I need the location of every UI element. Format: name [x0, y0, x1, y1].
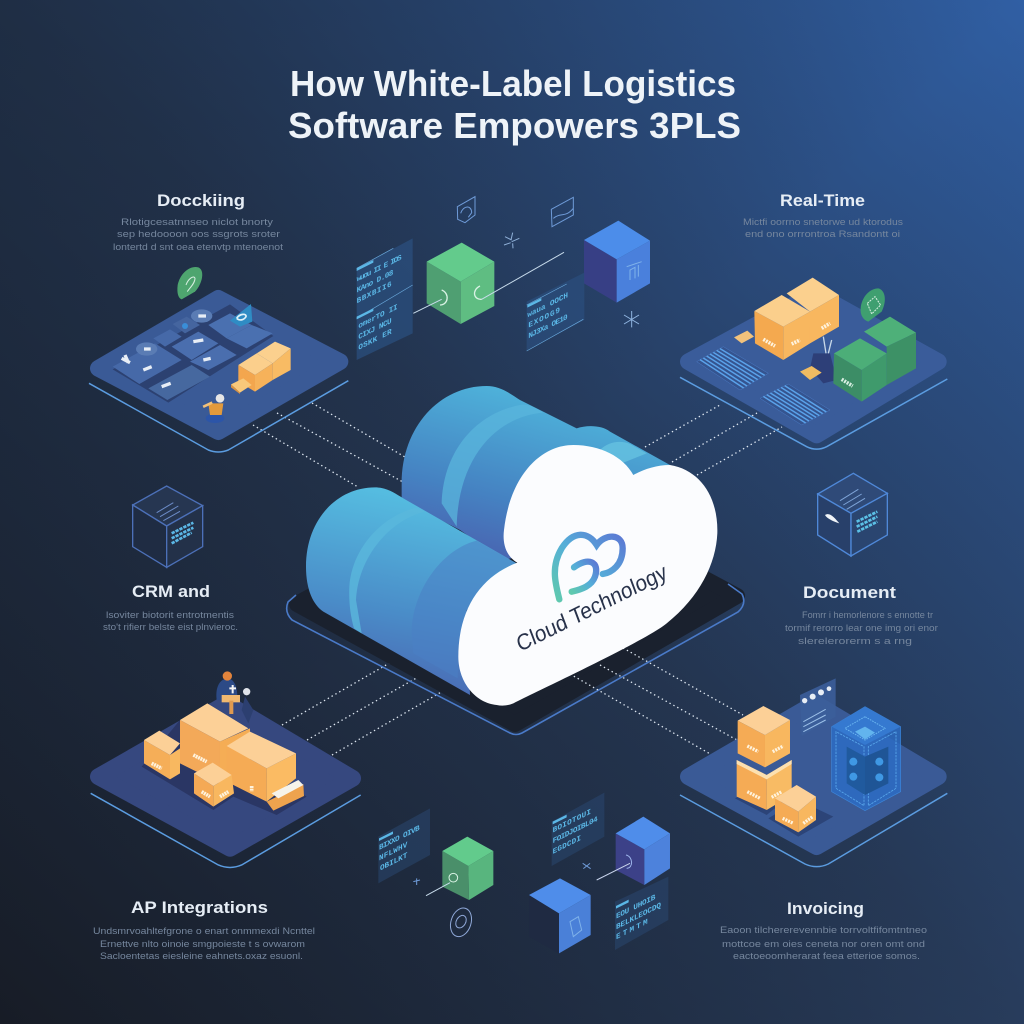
- real-time description: [743, 217, 903, 240]
- orange boxes: [231, 342, 291, 394]
- floating data sheets: EOU UHOIB: [616, 893, 655, 921]
- blue cube lower: [529, 878, 591, 953]
- title: [288, 63, 741, 146]
- dashboard window: [800, 678, 836, 736]
- floating data sheet left: omerTO II: [358, 303, 398, 331]
- icon: crm box: [133, 486, 203, 567]
- api description: [93, 926, 315, 962]
- cloud front lobe band: [349, 507, 425, 633]
- floating data sheet right: [527, 273, 584, 351]
- orange boxes: [735, 706, 833, 837]
- box shadow: [142, 720, 307, 815]
- crm heading: CRM and: [132, 582, 210, 601]
- floating data sheets: [378, 793, 668, 950]
- floating data sheet left: wuou II E IOS: [357, 253, 402, 284]
- blue cube upper: [583, 817, 670, 885]
- api description: Undsmrvoahltefgrone o enart onmmexdi Ncnttel: [93, 926, 315, 937]
- cloud white face: [458, 445, 717, 706]
- panel surface: [688, 293, 938, 435]
- icon: teal pin: [230, 304, 252, 327]
- invoicing heading: Invoicing: [787, 899, 864, 918]
- document description: [785, 610, 938, 647]
- orange boxes: [734, 278, 839, 360]
- floating data sheet left: KAno D.08: [357, 269, 393, 295]
- document description: slerelerorerm s a rng: [798, 636, 912, 647]
- real-time heading: Real-Time: [780, 191, 865, 210]
- document heading: Document: [803, 583, 896, 602]
- floating data sheets: BELKLEOCDQ: [616, 901, 661, 932]
- worker figures: [216, 671, 253, 723]
- icon: green pin: [177, 267, 202, 299]
- icon: document box: [818, 473, 887, 556]
- icon: ring: [447, 905, 475, 939]
- floating data sheet left: BBXBII6: [357, 280, 392, 306]
- hub: upper integration cubes: [357, 197, 650, 360]
- panel surface: [98, 703, 353, 848]
- document description: Fomrr i hemorlenore s ennotte tr: [802, 610, 933, 621]
- invoicing description: Eaoon tilchererevennbie torrvoltfifomtntneo: [720, 925, 927, 936]
- panel: docking: [89, 267, 348, 452]
- dotted connectors: [253, 403, 782, 755]
- real-time description: end ono orrrontroa Rsandontt oi: [745, 229, 900, 240]
- floating data sheet left: OSKK ER: [358, 328, 392, 353]
- cloud front lobe: [306, 487, 517, 695]
- panel surface: [98, 298, 340, 432]
- green cube: [413, 243, 564, 324]
- docking heading: Docckiing: [157, 191, 245, 210]
- invoicing description: [720, 925, 927, 962]
- panel: invoicing: [680, 678, 947, 867]
- hub: lower integration cubes: [378, 793, 670, 953]
- cloud label: Cloud Technology: [513, 559, 670, 657]
- title: How White-Label Logistics: [290, 63, 736, 104]
- docking description: [113, 217, 283, 253]
- title: Software Empowers 3PLS: [288, 105, 741, 146]
- central platform: [287, 480, 744, 734]
- floating data sheet right: NJ3Xa OE10: [528, 313, 568, 341]
- real-time description: Mictfi oorrno snetorwe ud ktorodus: [743, 217, 903, 228]
- crm description: [103, 610, 238, 633]
- floating data sheet right: waua OOCH: [527, 291, 568, 320]
- panel base edge: [680, 793, 947, 867]
- panel base edge: [91, 793, 361, 867]
- cloud back lobe: [402, 386, 670, 560]
- cloud right lobe band: [600, 442, 647, 467]
- invoicing description: mottcoe em oies ceneta nor oren omt ond: [722, 939, 925, 950]
- cloud logo: [555, 535, 623, 599]
- crm description: sto't rifierr belste eist plnvieroc.: [103, 622, 238, 633]
- docking description: lontertd d snt oea etenvtp mtenoenot: [113, 242, 283, 253]
- cloud: [306, 386, 717, 706]
- dotted connectors over platform: [570, 648, 743, 755]
- floating data sheet left: [357, 238, 413, 360]
- worker figure: [203, 394, 224, 423]
- floating data sheets: OBILKT: [380, 851, 407, 873]
- cloud back lobe band: [442, 405, 543, 527]
- floating data sheets: BIXXO OIVB: [379, 824, 420, 853]
- holographic server cube: [832, 707, 901, 811]
- orange boxes: [144, 703, 304, 811]
- crm description: lsoviter biotorit entrotmentis: [106, 610, 234, 621]
- floating data sheet left: CIXJ NCU: [358, 317, 392, 342]
- cloud front lobe inner shade: [412, 541, 517, 678]
- conveyor pads: [697, 347, 830, 425]
- panel base edge: [89, 381, 348, 452]
- docking description: sep hedoooon oos ssgrots sroter: [117, 229, 280, 240]
- docking description: Rlotigcesatnnseo niclot bnorty: [121, 217, 273, 228]
- blue cube: [584, 221, 650, 303]
- green cube: [413, 837, 493, 900]
- floating data sheets: ETMTM: [616, 918, 648, 942]
- panel surface: [688, 703, 938, 847]
- floating data sheets: BOIOTOUI: [553, 808, 591, 835]
- floating data sheet right: EXOOG9: [528, 306, 560, 330]
- api description: Sacloentetas eiesleine eahnets.oxaz esuonl.: [100, 951, 303, 962]
- green boxes: [833, 317, 916, 402]
- api description: Ernettve nlto oinoie smgpoieste t s ovwarom: [100, 939, 305, 950]
- floating data sheets: NFLWHV: [379, 841, 407, 863]
- worker figure: [800, 337, 837, 383]
- floating data sheets: FOIDJOIBL04: [553, 815, 598, 846]
- panel: real-time: [680, 278, 947, 449]
- floating data sheets: EGDCDI: [553, 834, 581, 857]
- panel base edge: [680, 377, 947, 449]
- api heading: AP Integrations: [131, 898, 268, 917]
- panel: api integrations: [91, 671, 361, 867]
- document description: tormif rerorro lear one img ori enor: [785, 623, 938, 634]
- tile grid: [113, 304, 273, 403]
- floating outline icons: [457, 197, 639, 327]
- icon: green pin: [861, 288, 885, 322]
- invoicing description: eactoeoomherarat feea etterioe somos.: [733, 951, 920, 962]
